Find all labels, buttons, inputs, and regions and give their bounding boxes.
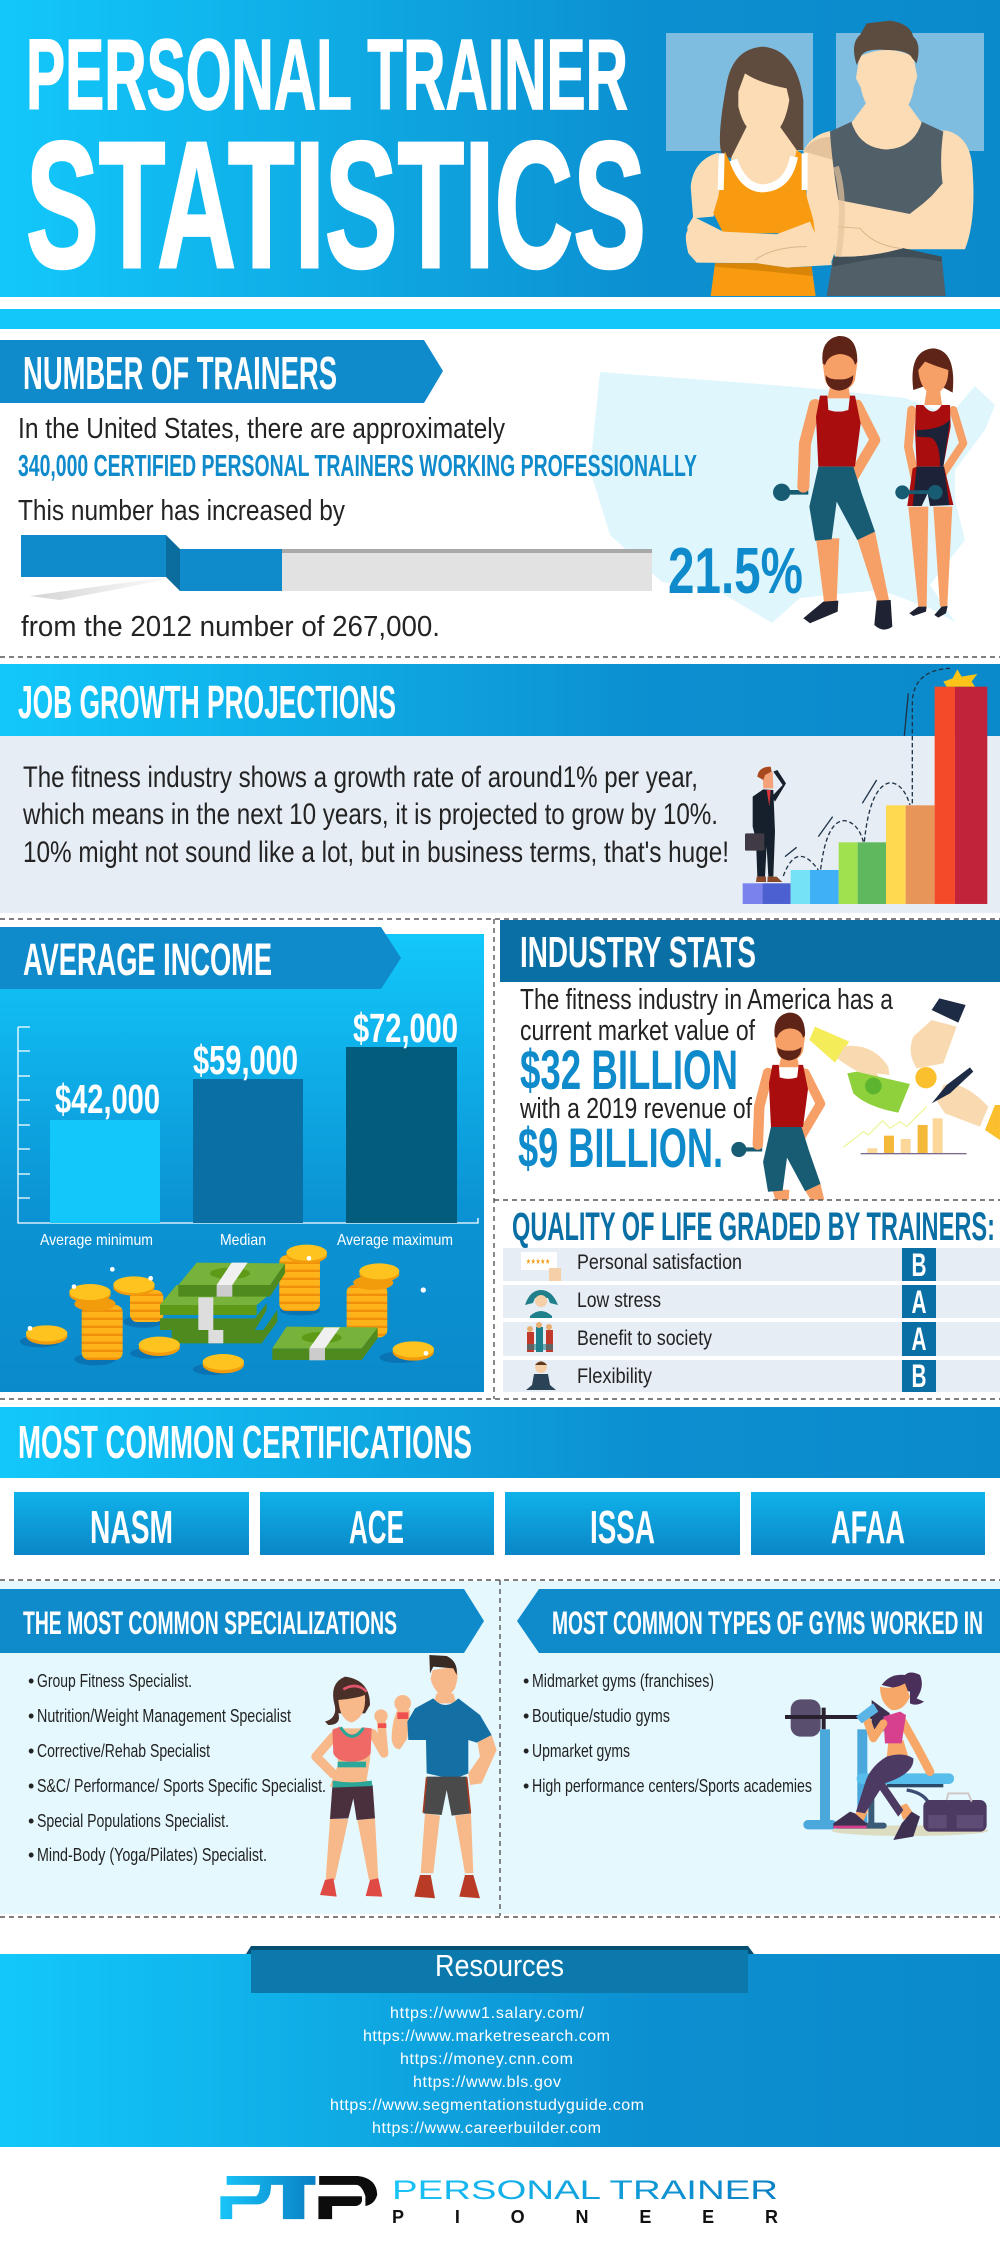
market value text: current market value of (520, 1015, 756, 1047)
bar: average minimum: $42,000 (55, 1076, 160, 1122)
body text: which means in the next 10 years, it is projected to grow by 10%. (22, 798, 718, 831)
specializations list: Mind-Body (Yoga/Pilates) Specialist. (37, 1845, 267, 1865)
heading banner: AVERAGE INCOME (23, 934, 272, 985)
bar: average minimum: Average minimum (40, 1232, 153, 1249)
body text: 10% might not sound like a lot, but in business terms, that's huge! (23, 836, 729, 869)
dashed dividers (0, 657, 1000, 1917)
heading band (500, 920, 1000, 982)
gym types list: Boutique/studio gyms (532, 1706, 670, 1726)
row: personal satisfaction: B (912, 1247, 926, 1283)
illustration: man with crossed arms (803, 21, 973, 296)
market value text (518, 984, 894, 1179)
body text: The fitness industry shows a growth rate of around1% per year, (23, 761, 698, 794)
row: flexibility (503, 1358, 1000, 1394)
row: benefit to society: Benefit to society (577, 1327, 712, 1350)
illustration: bearded man with dumbbell (773, 336, 892, 630)
header banner (0, 0, 1000, 306)
resource links (330, 2005, 644, 2137)
certification: NASM (14, 1492, 249, 1555)
body text (22, 761, 729, 869)
section: average income (0, 927, 484, 1392)
specializations list: • (28, 1671, 34, 1691)
panel background (0, 934, 484, 1392)
resource links: https://www.bls.gov (413, 2074, 561, 2091)
intro text: This number has increased by (18, 495, 345, 527)
logo wordmark: PERSONAL TRAINER (392, 2175, 778, 2205)
specializations list: Group Fitness Specialist. (37, 1671, 192, 1691)
bar: average maximum: Average maximum (337, 1232, 453, 1249)
heading band: INDUSTRY STATS (520, 928, 756, 977)
backdrop squares (666, 33, 984, 151)
row: low stress (503, 1284, 1000, 1320)
closing text: from the 2012 number of 267,000. (21, 611, 440, 643)
gym types list: High performance centers/Sports academies (532, 1776, 812, 1796)
gym types list: • (523, 1706, 529, 1726)
section: most common certifications (0, 1407, 1000, 1555)
specializations list: • (28, 1741, 34, 1761)
gym types list: • (523, 1776, 529, 1796)
heading banner (0, 1589, 484, 1653)
certification: AFAA (751, 1492, 985, 1555)
panel: most common specializations (0, 1589, 497, 1898)
title: personal trainer statistics (26, 19, 646, 306)
chart axes (18, 1027, 478, 1223)
row: flexibility: Flexibility (577, 1365, 652, 1388)
specializations list: Special Populations Specialist. (37, 1811, 229, 1831)
single coins (26, 1325, 434, 1373)
illustration: woman flexing (316, 1677, 388, 1897)
bar: median (193, 1037, 303, 1249)
intro text: In the United States, there are approximately (18, 413, 505, 445)
band background (0, 1954, 1000, 2147)
row: low stress: Low stress (577, 1289, 661, 1312)
certification: ISSA: ISSA (590, 1501, 655, 1553)
row: benefit to society: A (912, 1321, 926, 1357)
cyan divider band (0, 309, 1000, 329)
heading band: JOB GROWTH PROJECTIONS (18, 676, 396, 728)
heading banner (0, 340, 443, 403)
row: personal satisfaction: Personal satisfaction (577, 1251, 742, 1274)
illustration: woman at gym bench (785, 1672, 988, 1840)
stat: 21.5%: 21.5% (668, 534, 803, 607)
bar: average maximum: $72,000 (353, 1005, 458, 1051)
resource links: https://money.cnn.com (400, 2051, 573, 2068)
logo wordmark: PIONEER (392, 2207, 778, 2227)
row: low stress: A (912, 1284, 926, 1320)
section: job growth projections (0, 664, 1000, 913)
row: personal satisfaction: ★★★★★ (526, 1257, 550, 1266)
gym types list: • (523, 1741, 529, 1761)
logo: personal trainer pioneer (220, 2175, 778, 2227)
heading banner: NUMBER OF TRAINERS (23, 347, 337, 399)
heading band (0, 1407, 1000, 1478)
market value text: $9 BILLION. (518, 1116, 723, 1179)
illustration: money and coins (20, 1245, 434, 1375)
income bar chart (18, 1005, 478, 1249)
illustration: businessman (745, 767, 786, 882)
section: resources (0, 1946, 1000, 2147)
gym types list: • (523, 1671, 529, 1691)
gym types list (523, 1671, 812, 1796)
resource links: https://www.segmentationstudyguide.com (330, 2097, 644, 2114)
specializations list: • (28, 1706, 34, 1726)
resource links: https://www1.salary.com/ (390, 2005, 585, 2022)
panel: most common gym types (517, 1589, 1000, 1840)
jump arrows (783, 668, 950, 876)
logo mark PTP (220, 2176, 377, 2219)
map of the united states (590, 372, 995, 623)
panel background (0, 736, 1000, 913)
certification: ISSA (505, 1492, 740, 1555)
specializations list (28, 1671, 326, 1865)
panel: specializations and gyms background (0, 1581, 1000, 1914)
illustration: man flexing (392, 1655, 497, 1898)
resource links: https://www.careerbuilder.com (372, 2120, 601, 2137)
heading banner (517, 1589, 1000, 1653)
specializations list: Corrective/Rehab Specialist (37, 1741, 210, 1761)
illustration: woman with crossed arms (686, 47, 838, 296)
row: flexibility: B (912, 1358, 926, 1394)
illustration: trainer with dumbbell (731, 1013, 824, 1200)
illustration: woman with dumbbell (895, 348, 963, 618)
heading band: MOST COMMON CERTIFICATIONS (18, 1416, 472, 1468)
market value text: $32 BILLION (520, 1038, 738, 1101)
rising step bar chart (743, 668, 987, 904)
certification: ACE: ACE (349, 1501, 404, 1553)
market value text: The fitness industry in America has a (520, 984, 894, 1016)
certification: ACE (260, 1492, 494, 1555)
specializations list: • (28, 1845, 34, 1865)
market value text: with a 2019 revenue of (519, 1093, 753, 1125)
specializations list: S&C/ Performance/ Sports Specific Specialist. (37, 1776, 326, 1796)
row: benefit to society (503, 1321, 1000, 1357)
heading band (0, 664, 1000, 736)
bar: median: Median (220, 1232, 266, 1249)
specializations list: Nutrition/Weight Management Specialist (37, 1706, 291, 1726)
specializations list: • (28, 1776, 34, 1796)
logo wordmark (392, 2175, 778, 2227)
intro text (18, 413, 697, 527)
bar: median: $59,000 (193, 1037, 298, 1083)
certification: AFAA: AFAA (831, 1501, 905, 1553)
gym types list: Upmarket gyms (532, 1741, 630, 1761)
specializations list: • (28, 1811, 34, 1831)
section: quality of life (503, 1205, 1000, 1394)
section: industry stats (500, 920, 1000, 1200)
section: number of trainers (0, 336, 995, 643)
progress bar (21, 535, 652, 600)
certification: NASM: NASM (90, 1501, 173, 1553)
resource links: https://www.marketresearch.com (363, 2028, 610, 2045)
starburst (943, 669, 977, 687)
heading banner: THE MOST COMMON SPECIALIZATIONS (23, 1605, 397, 1641)
row: personal satisfaction (503, 1247, 1000, 1283)
bar: average minimum (40, 1076, 160, 1249)
bar: average maximum (337, 1005, 458, 1249)
gym types list: Midmarket gyms (franchises) (532, 1671, 714, 1691)
illustration: hands with money and chart (809, 998, 1000, 1154)
bills (172, 1310, 277, 1343)
resources title box (246, 1946, 754, 1993)
resources title box: Resources (435, 1948, 564, 1983)
